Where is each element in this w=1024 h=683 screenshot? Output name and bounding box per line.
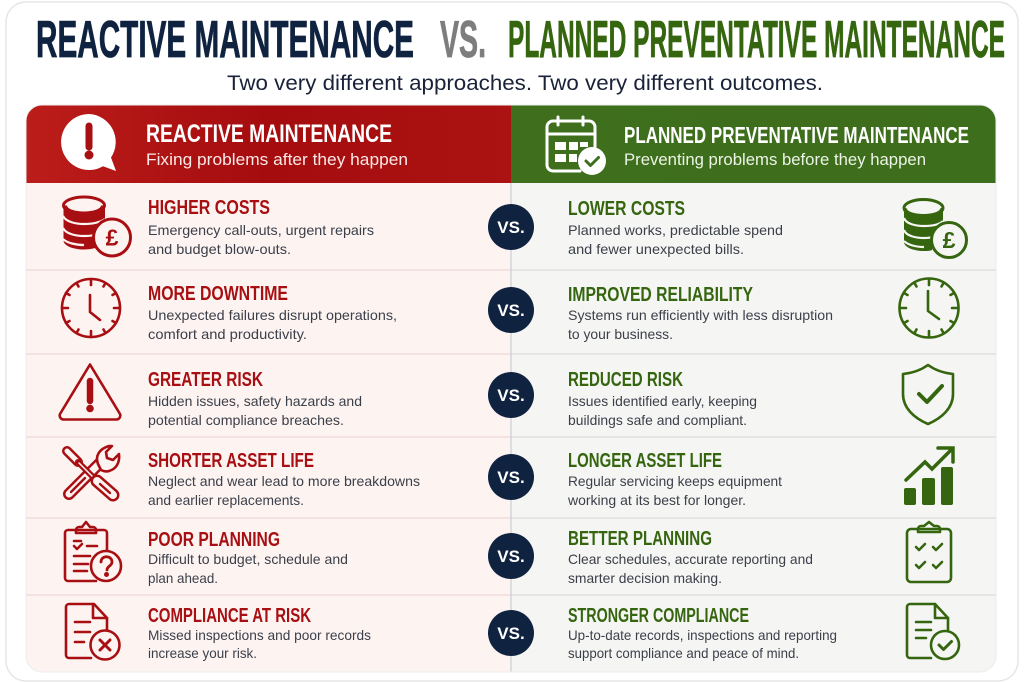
row 6 left: compliance at risk: increase your risk. — [148, 645, 257, 661]
icon: document check — [907, 604, 959, 659]
row 6 right: stronger compliance — [568, 604, 959, 661]
icon: clipboard checklist — [907, 522, 951, 582]
row 2 right: improved reliability: Systems run efficiently with less disruption — [568, 307, 833, 323]
icon: document cross — [66, 604, 120, 660]
vs badge 1 — [488, 204, 534, 250]
wrench — [69, 462, 101, 494]
header: reactive maintenance — [61, 114, 408, 171]
row 3 right: reduced risk: Issues identified early, keeping — [568, 393, 757, 409]
icon: calendar check — [547, 117, 606, 175]
row 3 right: reduced risk — [568, 365, 953, 428]
row 3 right: reduced risk: REDUCED RISK — [568, 368, 683, 391]
icon: warning triangle — [60, 364, 120, 420]
vs badge 3: VS. — [497, 386, 525, 405]
row 2 right: improved reliability: IMPROVED RELIABILITY — [568, 283, 753, 306]
row 3 left: greater risk — [60, 364, 362, 428]
row 2 right: improved reliability: to your business. — [568, 326, 673, 342]
row 6 right: stronger compliance: STRONGER COMPLIANCE — [568, 604, 749, 627]
row 1 left: higher costs: and budget blow-outs. — [148, 241, 291, 257]
icon: clock green — [900, 278, 958, 338]
subtitle: Two very different approaches. Two very different outcomes. — [227, 72, 823, 95]
row 6 right: stronger compliance: Up-to-date records, inspections and reporting — [568, 627, 837, 643]
row 6 left: compliance at risk — [66, 604, 371, 661]
icon: clock — [62, 279, 120, 337]
row 1 left: higher costs: HIGHER COSTS — [148, 196, 270, 219]
vs badge 6 — [488, 610, 534, 656]
icon: coins pound: £ — [106, 224, 119, 250]
row 4 left: shorter asset life: SHORTER ASSET LIFE — [148, 449, 314, 472]
row 1 left: higher costs — [63, 196, 374, 257]
row 1 left: higher costs: Emergency call-outs, urgent repairs — [148, 222, 374, 238]
main title: REACTIVE MAINTENANCE — [36, 11, 414, 69]
vs badge 2: VS. — [497, 301, 525, 320]
screwdriver — [67, 451, 78, 462]
icon: rising bar chart — [904, 448, 953, 505]
row 5 left: poor planning: POOR PLANNING — [148, 528, 280, 551]
vs badge 5 — [488, 533, 534, 579]
row 5 right: better planning: smarter decision making. — [568, 570, 722, 586]
header: reactive maintenance: Fixing problems after they happen — [146, 151, 408, 169]
row 6 right: stronger compliance: support compliance and peace of mind. — [568, 645, 799, 661]
row 3 left: greater risk: potential compliance breaches. — [148, 412, 344, 428]
header: planned preventative maintenance — [547, 117, 969, 175]
row 1 right: lower costs — [568, 197, 966, 258]
row 3 right: reduced risk: buildings safe and compliant. — [568, 412, 747, 428]
row 2 left: more downtime: comfort and productivity. — [148, 326, 307, 342]
row 5 right: better planning: BETTER PLANNING — [568, 527, 712, 550]
row 2 right: improved reliability — [568, 278, 958, 342]
vs badge 3 — [488, 372, 534, 418]
row 6 left: compliance at risk: Missed inspections and poor records — [148, 627, 371, 643]
row 1 right: lower costs: Planned works, predictable spend — [568, 222, 783, 238]
row 3 left: greater risk: Hidden issues, safety hazards and — [148, 393, 362, 409]
row 1 right: lower costs: LOWER COSTS — [568, 197, 685, 220]
row 4 left: shorter asset life — [67, 446, 420, 508]
icon: coins pound green: £ — [943, 227, 956, 253]
row 1 right: lower costs: and fewer unexpected bills. — [568, 241, 744, 257]
main title: VS. — [440, 11, 486, 69]
row 5 right: better planning — [568, 522, 951, 586]
icon: coins pound green — [904, 200, 966, 258]
row 4 right: longer asset life: working at its best for longer. — [567, 492, 746, 508]
comparison table — [26, 105, 996, 672]
row 4 left: shorter asset life: Neglect and wear lead to more breakdowns — [148, 473, 420, 489]
main title — [36, 11, 1005, 69]
row 6 left: compliance at risk: COMPLIANCE AT RISK — [148, 604, 311, 627]
icon: clipboard question — [65, 522, 121, 581]
header: reactive maintenance: REACTIVE MAINTENANCE — [146, 120, 392, 148]
row 4 right: longer asset life: LONGER ASSET LIFE — [568, 449, 722, 472]
row 2 left: more downtime: MORE DOWNTIME — [148, 282, 288, 305]
row 2 left: more downtime: Unexpected failures disrupt operations, — [148, 307, 397, 323]
icon: alert speech bubble — [61, 114, 116, 171]
icon: crossed tools — [67, 446, 119, 495]
row 4 left: shorter asset life: and earlier replacements. — [148, 492, 304, 508]
row 3 left: greater risk: GREATER RISK — [148, 368, 263, 391]
row 2 left: more downtime — [62, 279, 397, 342]
row 5 right: better planning: Clear schedules, accurate reporting and — [568, 551, 813, 567]
icon: coins pound — [63, 197, 130, 256]
row 5 left: poor planning: Difficult to budget, schedule and — [148, 551, 348, 567]
vs badge 2 — [488, 287, 534, 333]
vs badge 4 — [488, 454, 534, 500]
vs badge 6: VS. — [497, 624, 525, 643]
header: planned preventative maintenance: Preventing problems before they happen — [624, 151, 926, 169]
icon: shield check — [903, 365, 953, 424]
vs badge 5: VS. — [497, 547, 525, 566]
vs badge 1: VS. — [497, 218, 525, 237]
vs badge 4: VS. — [497, 468, 525, 487]
row 5 left: poor planning: plan ahead. — [148, 570, 218, 586]
row 4 right: longer asset life: Regular servicing keeps equipment — [568, 473, 782, 489]
row 4 right: longer asset life — [567, 448, 953, 508]
row 5 left: poor planning — [65, 522, 348, 586]
